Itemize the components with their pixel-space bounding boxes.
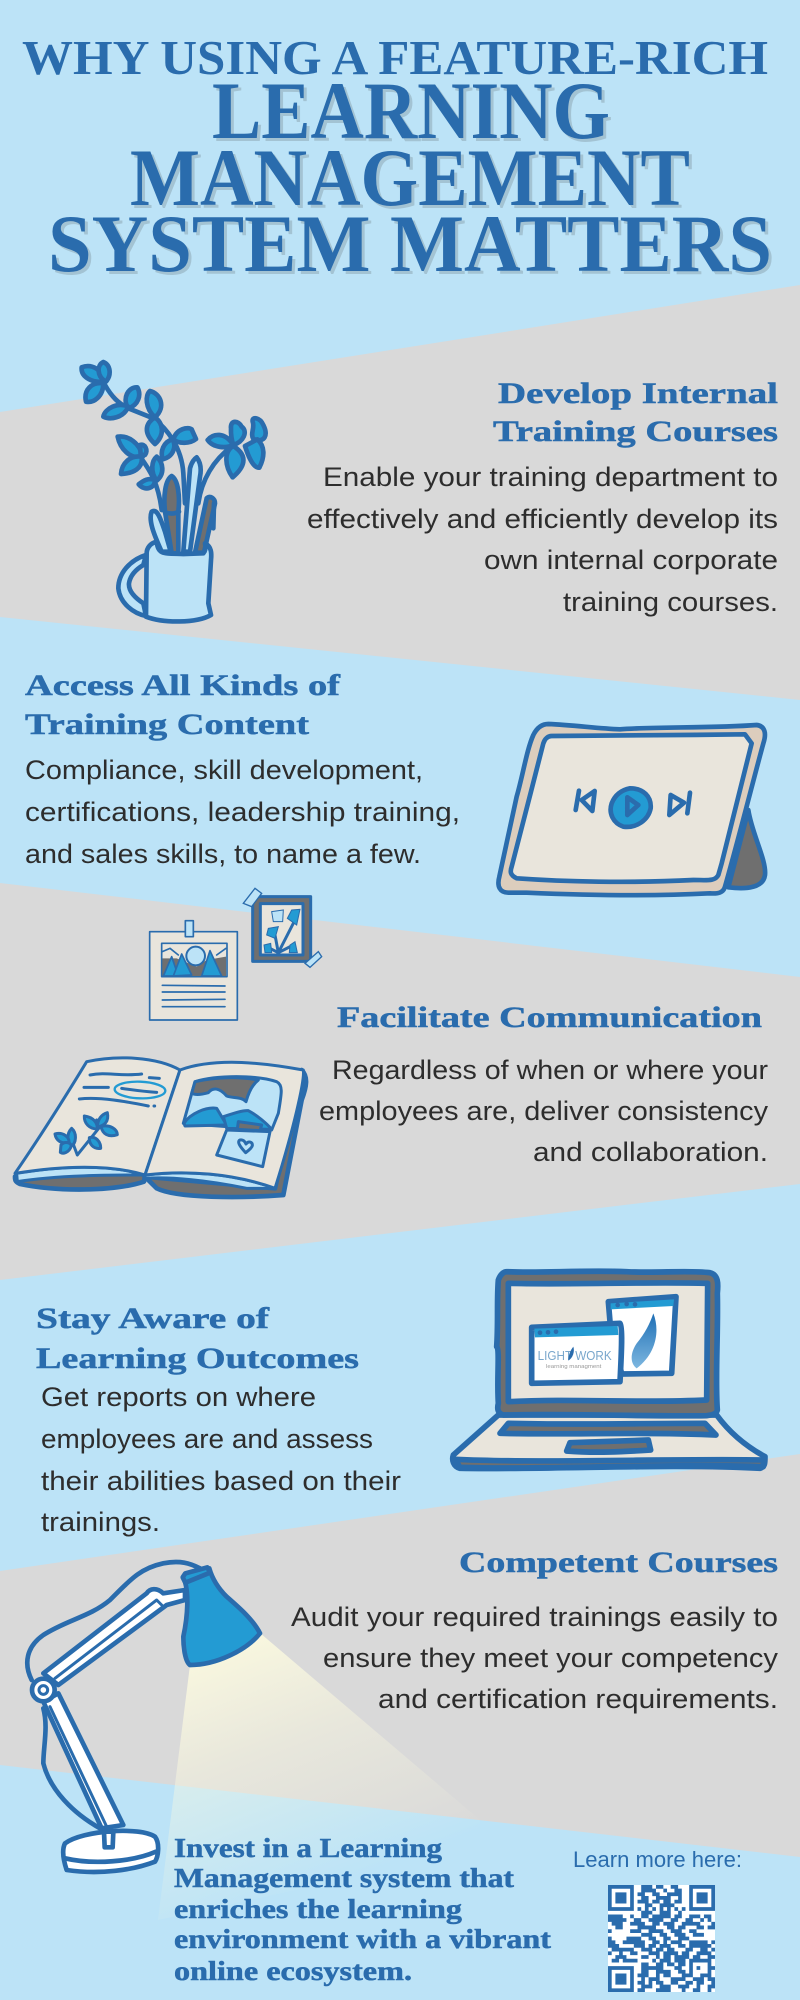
- body: [41, 1382, 401, 1537]
- body: Compliance, skill development,: [25, 755, 423, 785]
- body: Get reports on where: [41, 1382, 316, 1412]
- body: Enable your training department to: [323, 462, 778, 492]
- body: Regardless of when or where your: [332, 1055, 768, 1085]
- closing statement: enriches the learning: [174, 1894, 463, 1924]
- text block: access all kinds: [25, 669, 460, 869]
- icon: laptop with LightWork windows: [453, 1271, 765, 1469]
- light beam from lamp: [158, 1633, 480, 1920]
- text block: develop internal training: [307, 377, 778, 617]
- icon: mug with plants and pens: [82, 362, 266, 621]
- closing statement: online ecosystem.: [174, 1956, 412, 1986]
- body: Audit your required trainings easily to: [291, 1602, 778, 1632]
- closing statement: Invest in a Learning: [174, 1833, 443, 1863]
- heading: Competent Courses: [459, 1546, 778, 1579]
- heading: [25, 669, 341, 741]
- grey band 1: [0, 285, 800, 700]
- title: [22, 30, 772, 289]
- closing statement: environment with a vibrant: [174, 1924, 551, 1954]
- icon: open book: [15, 1058, 306, 1197]
- learn more label: Learn more here:: [573, 1847, 742, 1872]
- back window: [608, 1297, 676, 1374]
- body: and collaboration.: [533, 1137, 768, 1167]
- text block: facilitate communication: [319, 1001, 769, 1167]
- icon: desk lamp: [27, 1562, 260, 1872]
- heading: Training Content: [25, 708, 309, 741]
- title main lines: LEARNING: [212, 65, 610, 156]
- icon: tablet with media controls: [498, 724, 765, 895]
- icon: pinned paper with picture: [150, 921, 237, 1020]
- front window: [532, 1323, 622, 1383]
- body: ensure they meet your competency: [323, 1643, 779, 1673]
- grey band 3: [0, 1454, 800, 1857]
- heading: Learning Outcomes: [36, 1342, 359, 1375]
- body: own internal corporate: [484, 545, 778, 575]
- text block: competent courses: [291, 1546, 779, 1714]
- title main lines: [48, 65, 772, 289]
- body: employees are, deliver consistency: [319, 1096, 769, 1126]
- heading: Stay Aware of: [36, 1302, 270, 1335]
- body: trainings.: [41, 1507, 160, 1537]
- title main lines: SYSTEM MATTERS: [48, 198, 772, 289]
- front window: learning managment: [546, 1364, 602, 1370]
- heading: Develop Internal: [498, 377, 778, 410]
- heading: Training Courses: [493, 415, 778, 448]
- grey band 2: [0, 883, 800, 1280]
- body: [291, 1602, 779, 1714]
- heading: [36, 1302, 359, 1375]
- body: and sales skills, to name a few.: [25, 839, 421, 869]
- body: training courses.: [563, 587, 778, 617]
- body: effectively and efficiently develop its: [307, 504, 778, 534]
- QR code: [608, 1885, 715, 1992]
- body: [25, 755, 460, 869]
- text block: stay aware: [36, 1302, 401, 1537]
- title main lines: MANAGEMENT: [130, 132, 690, 223]
- body: [319, 1055, 769, 1167]
- body: certifications, leadership training,: [25, 797, 460, 827]
- body: their abilities based on their: [41, 1466, 401, 1496]
- heading: [493, 377, 778, 448]
- icon: framed flower picture: [243, 888, 322, 967]
- closing statement: Management system that: [174, 1863, 514, 1893]
- body: [307, 462, 778, 617]
- heading: Access All Kinds of: [25, 669, 341, 702]
- body: and certification requirements.: [378, 1684, 778, 1714]
- heading: Facilitate Communication: [337, 1001, 762, 1034]
- front window: LIGHT WORK: [538, 1349, 612, 1363]
- body: employees are and assess: [41, 1424, 373, 1454]
- closing statement: [174, 1833, 551, 1986]
- title line 1: WHY USING A FEATURE-RICH: [22, 30, 768, 85]
